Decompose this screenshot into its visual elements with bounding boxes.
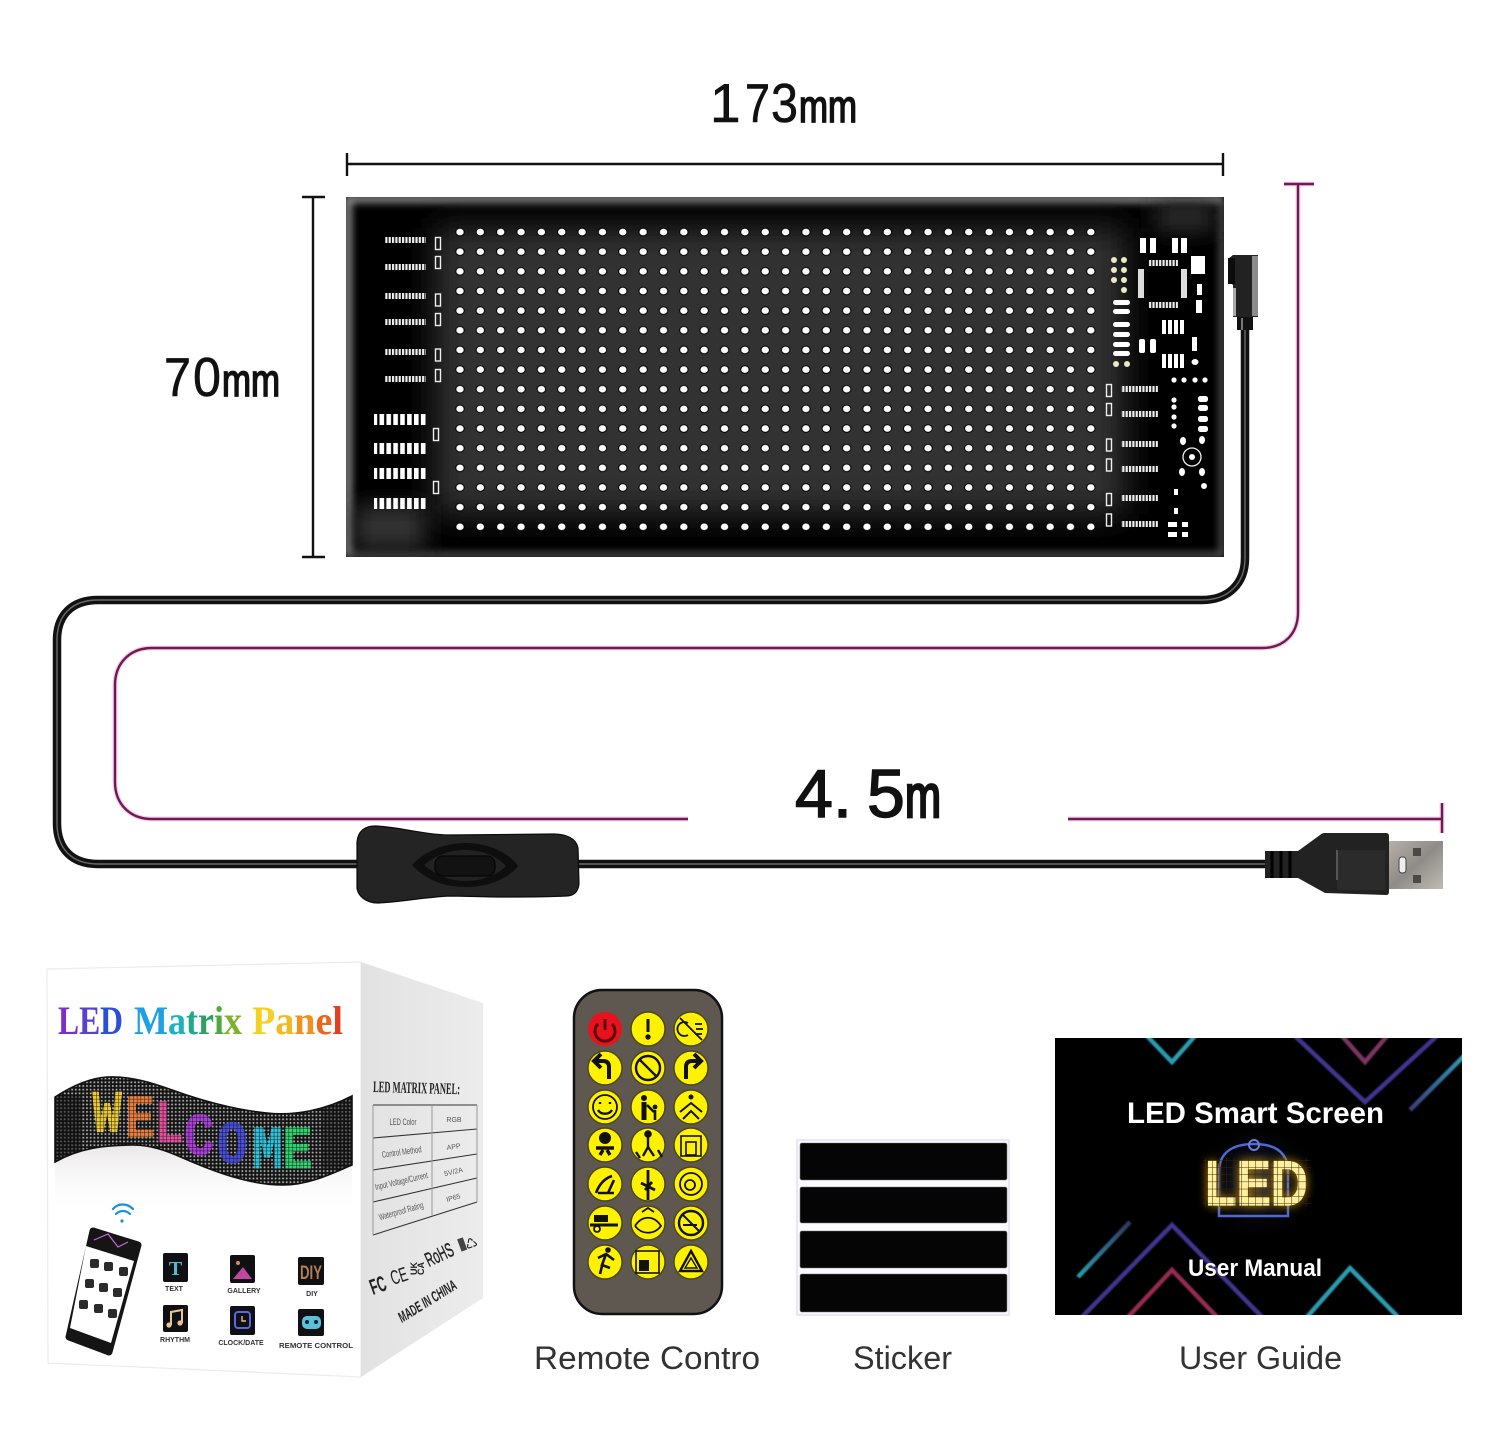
app icon: gallery — [227, 1255, 261, 1295]
app icon: rhythm: RHYTHM — [160, 1337, 190, 1344]
icon: phone — [69, 1231, 138, 1352]
caption: sticker: Sticker — [853, 1340, 952, 1376]
button grid — [588, 1012, 708, 1279]
panel inner sheen — [435, 228, 1125, 514]
box side spec table: Input Voltage/Current — [374, 1170, 429, 1192]
app icon: DIY: DIY — [306, 1291, 318, 1298]
app icon: text: T — [169, 1258, 183, 1280]
box side face — [361, 962, 483, 1377]
certification marks: CE — [388, 1264, 411, 1290]
app icon: text — [163, 1253, 188, 1293]
inline rocker switch — [357, 826, 579, 903]
LED dot matrix — [450, 222, 1101, 536]
certification marks — [366, 1233, 480, 1300]
flexible LED panel with WELCOME: O — [217, 1112, 248, 1181]
box title: LED — [58, 998, 123, 1043]
flexible LED panel with WELCOME: L — [154, 1092, 184, 1161]
remote control — [574, 990, 722, 1314]
app icon: text: TEXT — [165, 1286, 184, 1293]
flexible LED panel with WELCOME: E — [125, 1087, 155, 1156]
app icon: DIY — [298, 1257, 324, 1298]
icon: wifi — [113, 1204, 133, 1223]
app icon: rhythm — [160, 1305, 190, 1344]
bell and LED logo: LED — [1205, 1149, 1308, 1219]
box side spec table: Control Method — [381, 1144, 422, 1160]
flexible LED panel with WELCOME: M — [252, 1117, 283, 1186]
user manual cover — [1055, 1036, 1464, 1317]
width dimension: 173mm: 7 — [745, 72, 770, 134]
made in china: MADE IN CHINA — [395, 1277, 460, 1326]
flexible LED panel with WELCOME — [54, 1076, 353, 1186]
cable length dimension line: 4.5m — [115, 184, 1442, 833]
button symbols — [590, 1018, 703, 1274]
cable length dimension line: 4.5m: m — [905, 763, 941, 830]
height dimension: 70mm: mm — [222, 355, 280, 406]
box title: Panel — [252, 998, 343, 1043]
width dimension: 173mm: 1 — [710, 72, 741, 134]
flexible LED panel with WELCOME: C — [184, 1104, 215, 1173]
app icon: clock/date — [218, 1306, 264, 1347]
cable — [57, 325, 1270, 864]
power button — [588, 1012, 622, 1046]
box side spec table: LED MATRIX PANEL: — [373, 1079, 460, 1098]
flexible LED panel with WELCOME: E — [282, 1117, 313, 1186]
app icon: gallery: GALLERY — [227, 1288, 261, 1295]
certification marks: FC — [366, 1271, 390, 1300]
box front face — [47, 962, 361, 1377]
box side spec table: RGB — [446, 1117, 462, 1124]
width dimension: 173mm: mm — [799, 81, 857, 132]
width dimension: 173mm: 3 — [771, 72, 798, 134]
panel edge highlights — [346, 197, 1224, 557]
certification marks: RoHS — [422, 1239, 457, 1272]
box title: Matrix — [134, 998, 242, 1043]
box side spec table: Waterproof Rating — [378, 1200, 425, 1222]
product box — [47, 962, 483, 1377]
left circuit components — [374, 237, 440, 509]
right angle connector — [1228, 255, 1258, 330]
sticker pack — [797, 1140, 1009, 1315]
height dimension: 70mm: 7 — [164, 346, 191, 408]
caption: remote control: Remote Contro — [534, 1340, 760, 1376]
app icon: clock/date: CLOCK/DATE — [218, 1340, 264, 1347]
certification marks: ♺ — [463, 1233, 480, 1253]
box side spec table: IP65 — [446, 1193, 462, 1204]
bell and LED logo — [1195, 1120, 1319, 1244]
box side spec table: 5V/2A — [444, 1167, 464, 1178]
USB plug — [1265, 833, 1443, 895]
cable length dimension line: 4.5m: 4.5 — [795, 756, 905, 832]
app icon: DIY: DIY — [300, 1263, 322, 1284]
box side spec table: LED Color — [390, 1117, 417, 1127]
width dimension: 173mm — [347, 72, 1223, 176]
neon decorative chevrons — [1078, 1036, 1464, 1317]
certification marks: UK — [409, 1262, 419, 1275]
LED panel — [346, 197, 1224, 557]
box title — [58, 998, 343, 1043]
certification marks: CA — [416, 1262, 426, 1275]
box side spec table: APP — [446, 1143, 462, 1152]
caption: user guide: User Guide — [1179, 1340, 1342, 1376]
manual heading: LED Smart Screen — [1127, 1097, 1384, 1130]
app icon: remote control: REMOTE CONTROL — [279, 1343, 354, 1350]
app icon: remote control — [279, 1309, 354, 1350]
height dimension: 70mm: 0 — [193, 346, 221, 408]
height dimension: 70mm — [164, 197, 325, 557]
box side spec table — [373, 1079, 477, 1235]
flexible LED panel with WELCOME: W — [92, 1082, 122, 1151]
right circuit components — [1106, 238, 1208, 537]
bell and LED logo: LED — [1205, 1149, 1308, 1219]
manual subtitle: User Manual — [1188, 1255, 1322, 1282]
